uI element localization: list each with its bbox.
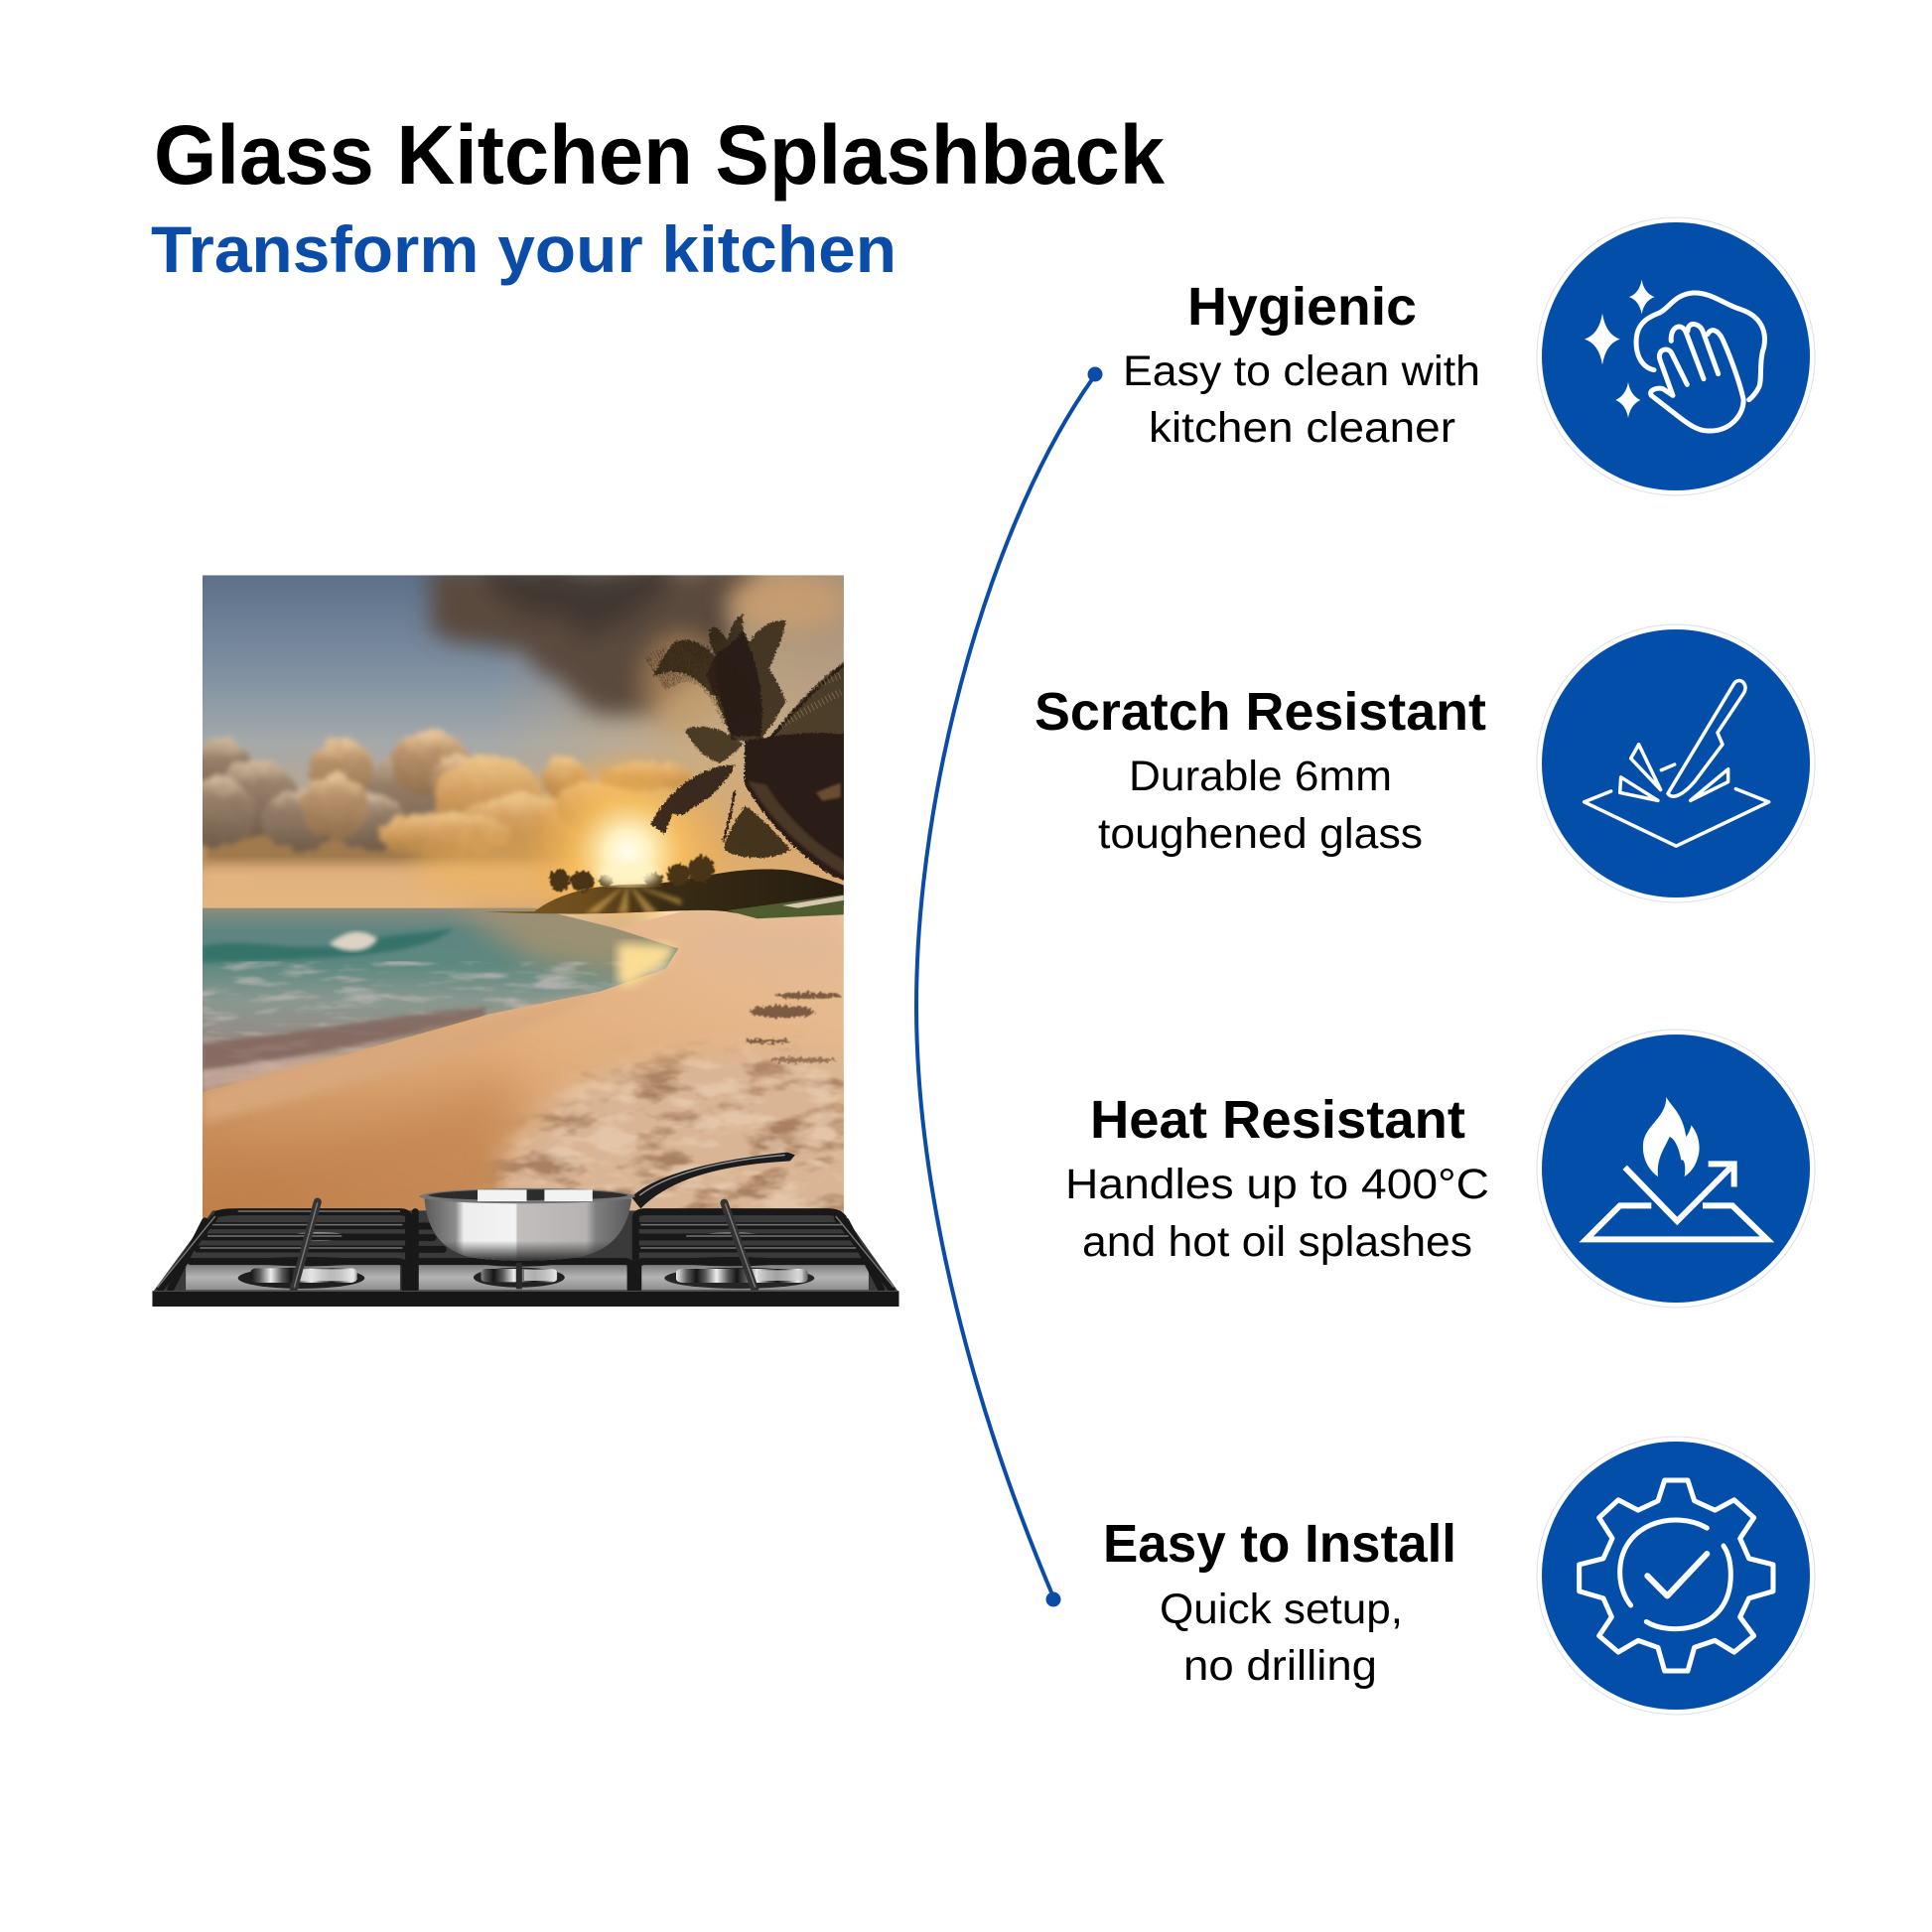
text: Scratch Resistant: Durable 6mm <box>1129 753 1392 800</box>
text: Scratch Resistant: Scratch Resistant <box>1035 682 1486 742</box>
island <box>483 869 844 913</box>
text: Easy to Install: Easy to Install <box>1103 1514 1456 1574</box>
text: Heat Resistant: and hot oil splashes <box>1082 1218 1472 1266</box>
sea <box>203 908 679 1093</box>
text: Hygienic: kitchen cleaner <box>1149 404 1455 452</box>
text: Scratch Resistant <box>1035 682 1486 858</box>
splashback photo: tropical beach at sunset <box>180 566 854 1245</box>
text: Heat Resistant <box>1065 1090 1489 1266</box>
icon: hand wiping with sparkles <box>1537 217 1815 495</box>
palm trees silhouette <box>650 614 854 884</box>
text: Hygienic <box>1123 277 1480 452</box>
subtitle: Transform your kitchen <box>151 212 897 286</box>
beach sand <box>203 905 844 1235</box>
connector arc with end dots <box>916 367 1102 1606</box>
gas hob <box>152 1153 899 1307</box>
text: Heat Resistant: Handles up to 400°C <box>1065 1161 1489 1208</box>
text: Easy to Install: Quick setup, <box>1160 1586 1403 1633</box>
burners <box>238 1232 814 1289</box>
text: Heat Resistant: Heat Resistant <box>1090 1090 1465 1150</box>
product image: beach splashback above gas hob with pan <box>152 566 899 1307</box>
grate bars <box>161 1212 892 1289</box>
text: Easy to Install <box>1103 1514 1456 1690</box>
icon: flame above reflecting surface <box>1537 1030 1815 1308</box>
text: Scratch Resistant: toughened glass <box>1098 810 1423 858</box>
text: Easy to Install: no drilling <box>1183 1642 1377 1690</box>
frying pan <box>419 1153 795 1261</box>
text: Hygienic: Hygienic <box>1187 277 1417 337</box>
title: Glass Kitchen Splashback <box>154 108 1165 202</box>
text: Hygienic: Easy to clean with <box>1123 347 1480 395</box>
icon: knife scratching glass <box>1537 624 1815 902</box>
icon: gear with check mark <box>1537 1437 1815 1715</box>
